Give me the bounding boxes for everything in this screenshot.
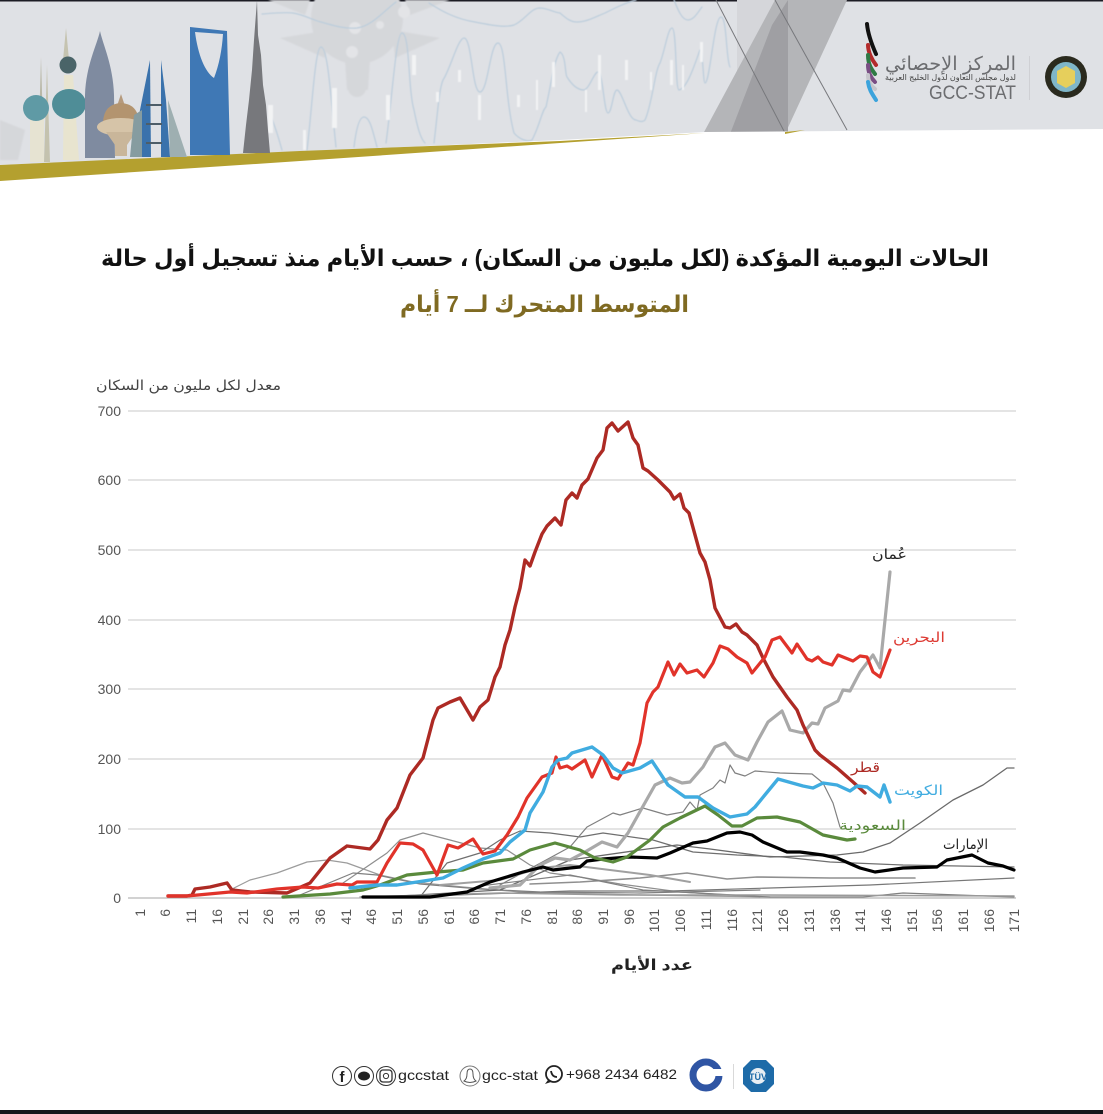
virus watermark <box>0 0 450 160</box>
x axis labels: 136 <box>827 909 843 932</box>
handle: gccstat: gccstat <box>398 1067 449 1083</box>
GCC emblem <box>1045 56 1087 98</box>
x axis labels: 131 <box>801 909 817 932</box>
x axis labels: 16 <box>209 909 225 925</box>
phone number: +968 2434 6482 <box>566 1066 677 1082</box>
x axis labels: 31 <box>286 909 302 925</box>
series: Kuwait <box>350 747 890 888</box>
logo divider <box>1029 56 1030 100</box>
x axis labels: 71 <box>492 909 508 925</box>
x axis labels: 61 <box>441 909 457 925</box>
x axis labels: 161 <box>955 909 971 932</box>
x axis labels: 156 <box>929 909 945 932</box>
subtitle: المتوسط المتحرك لــ 7 أيام <box>400 288 689 318</box>
label: Bahrain: البحرين <box>893 629 945 646</box>
Doha tower <box>85 31 115 158</box>
label: UAE: الإمارات <box>943 836 988 853</box>
gold wedge tail <box>785 130 805 134</box>
label: Saudi Arabia: السعودية <box>839 817 906 834</box>
white lower sweep <box>0 129 1103 190</box>
x axis labels: 146 <box>878 909 894 932</box>
grid lines <box>128 411 1016 898</box>
grey diagonal stripes <box>703 0 847 134</box>
y axis labels: 500 <box>98 542 121 558</box>
icon: facebook <box>332 1066 352 1086</box>
x axis labels: 21 <box>235 909 251 925</box>
y axis labels: 200 <box>98 751 121 767</box>
Oman monument <box>97 94 145 156</box>
icon: snapchat <box>460 1066 480 1086</box>
y axis labels: 0 <box>113 890 121 906</box>
series: Qatar <box>168 422 865 896</box>
footer contacts <box>332 1060 774 1092</box>
logo arabic name: المركز الإحصائي <box>885 54 1016 75</box>
icon: instagram <box>376 1066 396 1086</box>
series: Bahrain <box>168 637 890 896</box>
GCC-STAT logo <box>867 24 1087 104</box>
small Kuwait tower <box>23 57 50 162</box>
icon: facebook: f <box>340 1069 346 1086</box>
bottom bar <box>0 1110 1103 1114</box>
series: Oman <box>490 572 890 888</box>
icon: twitter <box>354 1066 374 1086</box>
virus spots <box>346 6 410 58</box>
x axis labels: 116 <box>724 909 740 931</box>
x axis labels: 76 <box>518 909 534 925</box>
x axis labels: 141 <box>852 909 868 932</box>
x axis labels: 171 <box>1006 909 1022 932</box>
background line curves <box>262 0 730 150</box>
x axis labels: 86 <box>569 909 585 925</box>
handle: gcc-stat: gcc-stat <box>482 1067 538 1083</box>
logo latin name: GCC-STAT <box>929 83 1016 104</box>
candlesticks <box>268 42 703 150</box>
x axis labels: 6 <box>157 909 173 917</box>
x axis labels: 56 <box>415 909 431 925</box>
x axis labels: 46 <box>363 909 379 925</box>
x axis labels: 36 <box>312 909 328 925</box>
x axis title: عدد الأيام <box>611 956 693 974</box>
x axis labels: 151 <box>904 909 920 932</box>
x axis labels <box>132 909 1022 932</box>
icon: whatsapp <box>545 1066 562 1084</box>
label: Qatar: قطر <box>850 759 880 776</box>
y axis labels: 100 <box>98 821 121 837</box>
y axis labels: 300 <box>98 681 121 697</box>
main title: الحالات اليومية المؤكدة (لكل مليون من السكان) ، حسب الأيام منذ تسجيل أول حالة <box>101 242 989 272</box>
large Kuwait tower <box>52 28 86 160</box>
y axis title: معدل لكل مليون من السكان <box>96 377 281 394</box>
x axis labels: 51 <box>389 909 405 925</box>
y axis labels: 600 <box>98 472 121 488</box>
gold wedge <box>0 133 705 181</box>
x axis labels: 26 <box>260 909 276 925</box>
Burj tower <box>243 0 270 153</box>
x axis labels: 166 <box>981 909 997 932</box>
header banner <box>0 0 1103 190</box>
x axis labels: 91 <box>595 909 611 925</box>
Kingdom tower <box>190 27 230 155</box>
Bahrain towers <box>130 60 187 157</box>
label: Oman: عُمان <box>872 546 907 562</box>
x axis labels: 96 <box>621 909 637 925</box>
x axis labels: 111 <box>698 909 714 930</box>
header top edge <box>0 0 1103 2</box>
footer divider <box>733 1064 734 1089</box>
icon: TUV badge <box>743 1060 774 1092</box>
x axis labels: 101 <box>646 909 662 932</box>
logo arabic subtitle: لدول مجلس التعاون لدول الخليج العربية <box>885 73 1016 82</box>
icon: TUV badge: TÜV <box>749 1072 767 1082</box>
series: Saudi Arabia <box>283 806 855 897</box>
label: Kuwait: الكويت <box>894 782 943 799</box>
x axis labels: 11 <box>183 909 199 924</box>
x axis labels: 106 <box>672 909 688 932</box>
series: UAE <box>363 832 1014 897</box>
other country thin lines <box>230 765 1014 897</box>
x axis labels: 126 <box>775 909 791 932</box>
x axis labels: 121 <box>749 909 765 932</box>
x axis labels: 81 <box>544 909 560 925</box>
x axis labels: 41 <box>338 909 354 925</box>
icon: certification ring <box>693 1062 724 1088</box>
logo ribbon <box>867 24 876 100</box>
x axis labels: 66 <box>466 909 482 925</box>
line chart <box>98 403 1022 974</box>
y axis labels <box>98 403 121 906</box>
x axis labels: 1 <box>132 909 148 917</box>
y axis labels: 700 <box>98 403 121 419</box>
skyline buildings <box>23 0 270 162</box>
y axis labels: 400 <box>98 612 121 628</box>
